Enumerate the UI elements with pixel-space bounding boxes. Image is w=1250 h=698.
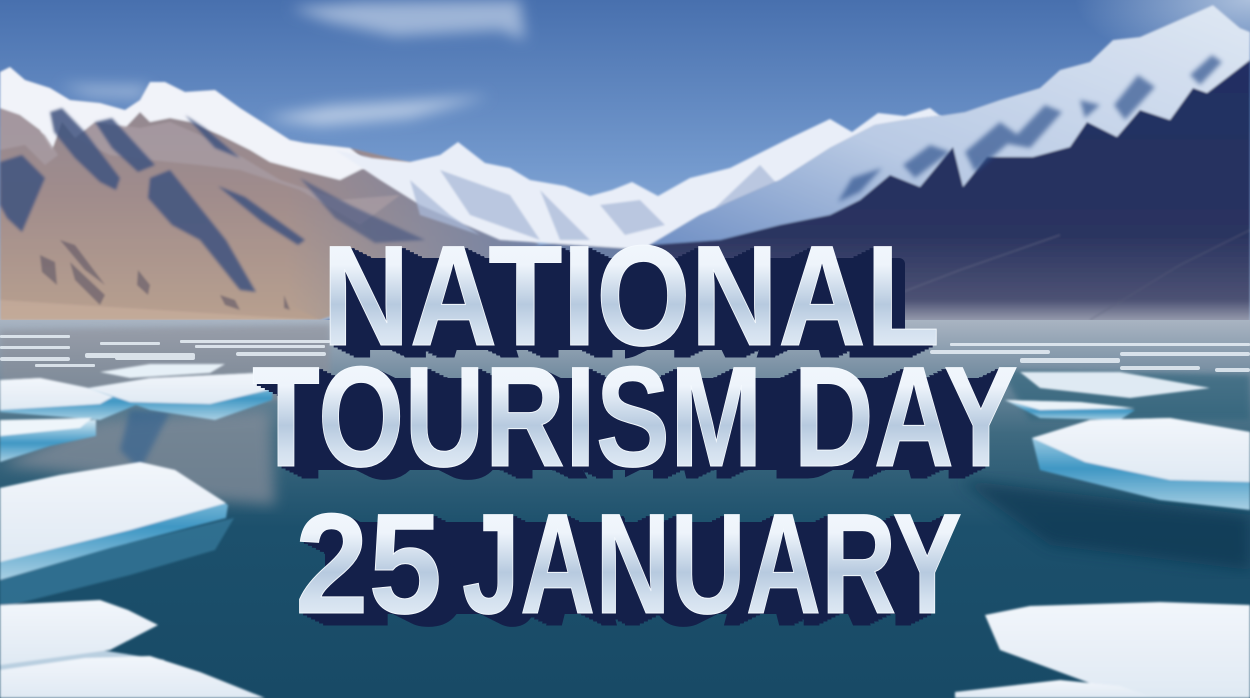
ice floes: right <box>955 372 1250 698</box>
distant ice streaks <box>0 335 1250 372</box>
dark rock bands <box>0 108 425 292</box>
title line: date number: 25 <box>295 485 442 644</box>
title <box>252 217 1018 644</box>
dark backing behind title letters <box>285 258 985 614</box>
title line: month: JANUARY <box>462 485 962 644</box>
distant snow peaks <box>320 108 950 322</box>
snow on left ridge <box>0 67 370 180</box>
title line: tourism day: TOURISM DAY <box>252 338 1018 497</box>
right navy mountains <box>640 5 1250 322</box>
ice floes: left <box>0 364 275 698</box>
reflections <box>0 410 275 505</box>
title line: national: NATIONAL <box>322 217 940 376</box>
water <box>0 320 1250 698</box>
sky <box>0 0 1250 330</box>
left brown mountains <box>0 67 540 322</box>
snow on right ridge <box>650 5 1250 245</box>
